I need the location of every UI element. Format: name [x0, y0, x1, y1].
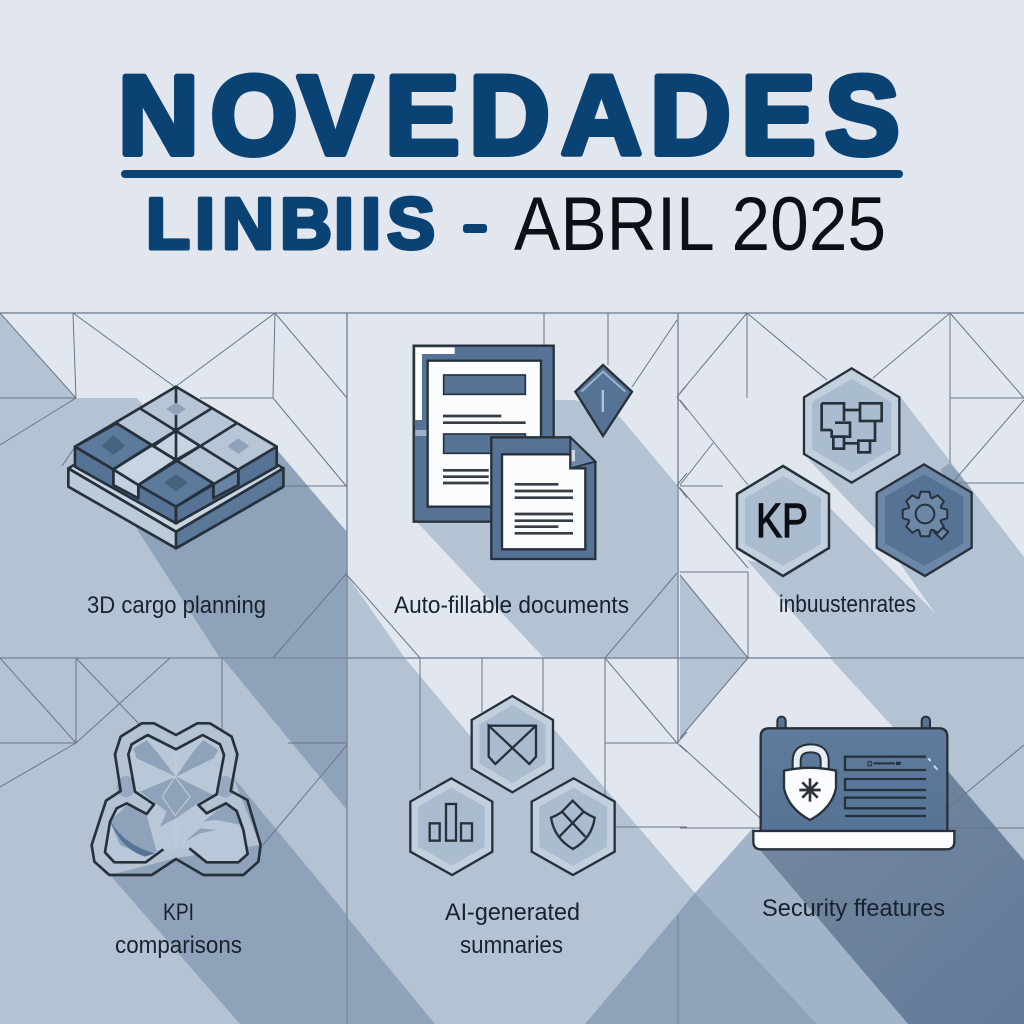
icon: hexagon workflow [804, 368, 899, 483]
label: 3D cargo planning [87, 592, 266, 619]
panel: AI-generated summaries [410, 696, 615, 959]
background: geometric shadow fills [0, 313, 1024, 1024]
panel: Security features [753, 717, 954, 922]
icon: documents [414, 346, 632, 559]
panel: Auto-fillable documents [394, 346, 632, 619]
icon: hexagon trio [410, 696, 615, 875]
label: summaries: sumnaries [460, 932, 563, 959]
label: Auto-fillable documents [394, 592, 629, 619]
panel: 3D cargo planning [68, 387, 283, 619]
label: inbuustenrates [779, 591, 916, 618]
icon: isometric cargo grid [68, 387, 283, 548]
panel: KPI comparisons [92, 723, 261, 959]
subtitle: LINBIIS: LINBIIS [146, 184, 435, 264]
icon: trefoil outline with butterfly [92, 723, 261, 875]
title [118, 53, 903, 267]
panel: hexagon trio with KP [737, 368, 972, 618]
background: thin grid lines [0, 313, 1024, 1024]
subtitle dash [463, 224, 487, 233]
label: AI-generated: AI-generated [445, 899, 580, 926]
label: KPI: KPI [163, 899, 194, 926]
icon: gear hexagon [877, 464, 972, 576]
label: Security ffeatures [762, 895, 945, 922]
icon: KP hexagon [737, 466, 829, 576]
label: comparisons: comparisons [115, 932, 242, 959]
subtitle: ABRIL 2025: ABRIL 2025 [514, 182, 886, 267]
icon: KP hexagon: KP [756, 495, 808, 548]
heading: NOVEDADES: NOVEDADES [118, 53, 900, 178]
icon: laptop with padlock shield [753, 717, 954, 849]
title rule [121, 170, 903, 178]
